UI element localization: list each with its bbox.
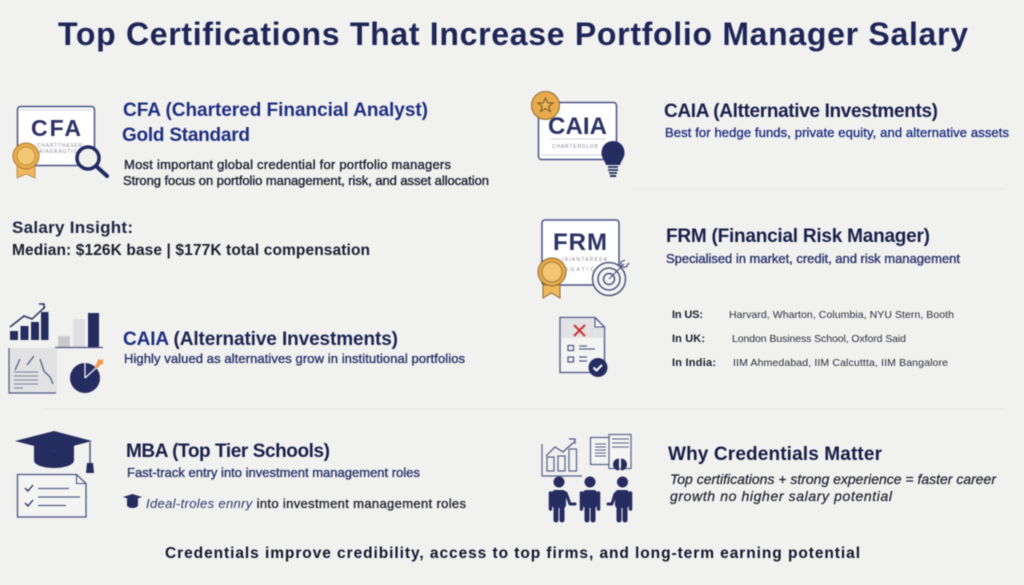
panel: MBA — [15, 431, 466, 517]
icon: CAIA certificate with lightbulb: CHARTERDLOB — [552, 144, 599, 150]
icon: charts group — [9, 304, 103, 393]
heading: MBA: MBA (Top Tier Schools) — [126, 441, 330, 462]
icon: CAIA certificate with lightbulb: CAIA — [548, 113, 607, 140]
text: India schools: In India: — [672, 357, 716, 369]
footer text: Credentials improve credibility, access to top firms, and long-term earning potential — [165, 545, 860, 562]
icon: CFA certificate: CHARTTH&SER — [37, 143, 82, 149]
icon: graduation cap with checklist — [15, 431, 94, 517]
text: CAIA left description: Highly valued as alternatives grow in institutional portfolios — [124, 351, 466, 366]
text: why credentials line 2: growth no higher salary potential — [670, 488, 893, 504]
icon: FRM certificate with target — [538, 220, 629, 298]
icon: FRM certificate with target: SGATICO — [565, 267, 600, 273]
text: CFA description line 1: Most important global credential for portfolio managers — [124, 157, 452, 172]
panel: why credentials matter — [542, 434, 997, 520]
icon: small graduation cap — [123, 494, 142, 508]
heading: CAIA left: CAIA (Alternative Investments) — [123, 329, 398, 350]
heading: why credentials matter: Why Credentials Matter — [668, 444, 883, 465]
text: MBA ideal roles: Ideal-troles ennry into investment management roles — [146, 496, 466, 511]
icon: checklist document — [560, 318, 608, 377]
text: US schools: Harvard, Wharton, Columbia, NYU Stern, Booth — [729, 309, 954, 321]
icon: FRM certificate with target: FRM — [553, 229, 607, 256]
panel: salary insight — [12, 218, 370, 259]
text: CAIA right description: Best for hedge funds, private equity, and alternative assets — [665, 125, 1010, 140]
text: median salary: Median: $126K base | $177K total compensation — [12, 242, 370, 259]
text: UK schools: London Business School, Oxford Said — [732, 333, 906, 345]
icon: CFA certificate — [13, 106, 107, 178]
text: FRM description: Specialised in market, credit, and risk management — [666, 251, 960, 266]
icon: charts and team — [542, 434, 631, 520]
text: US schools: In US: — [672, 309, 703, 321]
panel: FRM — [538, 220, 960, 298]
text: UK schools: In UK: — [672, 333, 705, 345]
icon: CFA certificate: CFA — [31, 115, 81, 141]
panel: CAIA alternative investments left — [9, 304, 466, 393]
panel: CAIA alternative investments right — [532, 92, 1010, 176]
icon: CFA certificate: AIAERAUTIC — [39, 149, 77, 155]
title: Top Certifications That Increase Portfolio Manager Salary — [58, 16, 968, 52]
text: India schools: IIM Ahmedabad, IIM Calcuttta, IIM Bangalore — [733, 357, 948, 369]
heading: Gold Standard: Gold Standard — [122, 125, 250, 146]
text: MBA fast-track: Fast-track entry into investment management roles — [127, 465, 420, 480]
panel: CFA — [13, 100, 489, 188]
heading: CFA: CFA (Chartered Financial Analyst) — [123, 100, 428, 121]
icon: CAIA certificate with lightbulb — [532, 92, 625, 176]
heading: salary insight: Salary Insight: — [12, 218, 133, 237]
text: CFA description line 2: Strong focus on portfolio management, risk, and asset allocation — [123, 173, 489, 188]
heading: FRM: FRM (Financial Risk Manager) — [666, 226, 930, 247]
icon: FRM certificate with target: IAIANTAREEA — [562, 257, 608, 263]
heading: CAIA right: CAIA (Altternative Investments) — [664, 101, 938, 122]
text: why credentials line 1: Top certifications + strong experience = faster career — [670, 471, 997, 487]
panel: schools list — [560, 309, 954, 377]
